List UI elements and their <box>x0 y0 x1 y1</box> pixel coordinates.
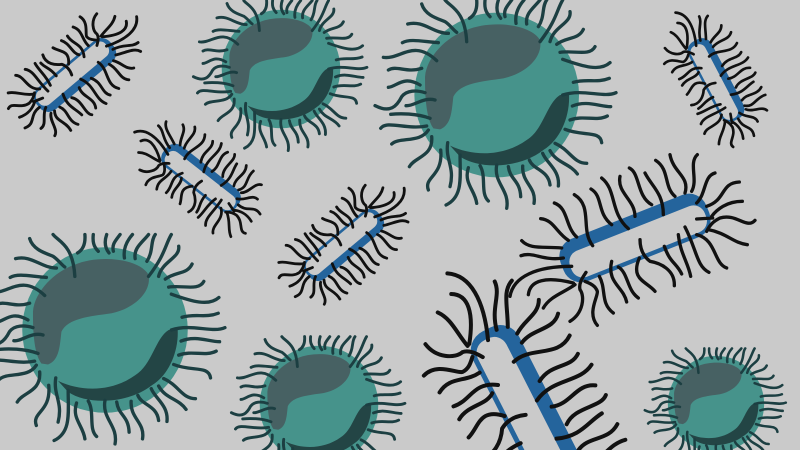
bacillus: left centre <box>120 90 279 264</box>
bacillus: right large <box>510 155 755 325</box>
bacillus: bottom centre large <box>414 258 634 450</box>
coccus: top centre-left <box>193 1 367 151</box>
coccus: top centre large <box>375 0 616 208</box>
bacillus: top left <box>0 0 164 147</box>
coccus: bottom left large <box>0 235 225 444</box>
bacillus: top right <box>659 4 770 153</box>
bacillus: centre <box>259 172 431 315</box>
coccus: bottom right <box>645 348 786 450</box>
coccus: bottom centre <box>231 337 405 450</box>
